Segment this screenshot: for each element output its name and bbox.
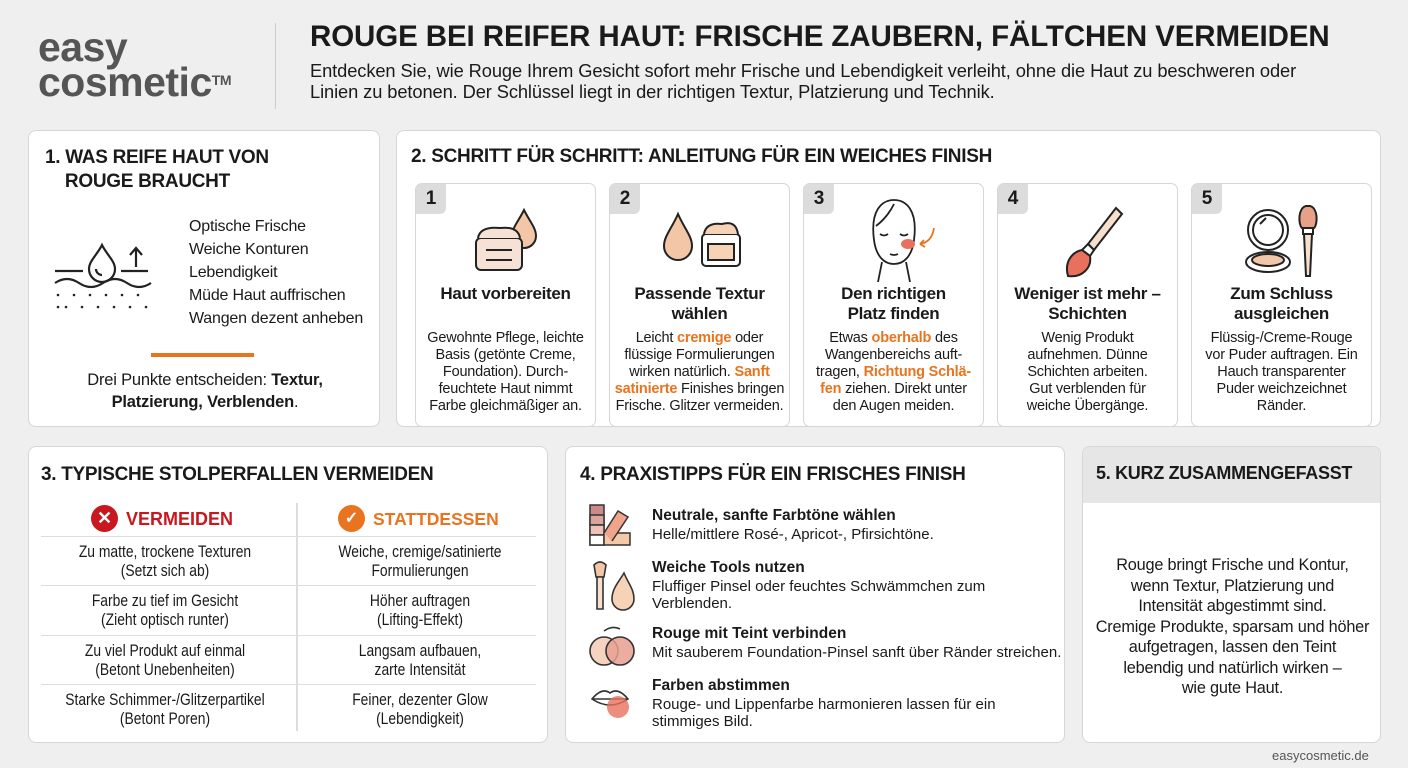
step 5: Hauch transparenter: [1217, 364, 1346, 380]
summary text: Intensität abgestimmt sind.: [1138, 597, 1327, 615]
step 4: Gut verblenden für: [1029, 381, 1146, 397]
step 5: 5: [1202, 188, 1212, 209]
benefit list: Lebendigkeit: [189, 264, 277, 281]
summary text: Rouge bringt Frische und Kontur,: [1116, 556, 1349, 574]
icon: face with blush: [872, 199, 935, 282]
summary text: [1096, 556, 1370, 697]
step 4: Schichten arbeiten.: [1027, 364, 1148, 380]
step 3: den Augen meiden.: [833, 398, 954, 414]
tip 1: [652, 507, 934, 543]
step 1: Gewohnte Pflege, leichte: [427, 330, 584, 346]
panel 3: pitfalls: [28, 446, 548, 743]
column header: avoid: VERMEIDEN: [126, 509, 233, 529]
step 4: Schichten: [1048, 304, 1127, 323]
column header: instead: [338, 505, 499, 532]
step 1: [415, 183, 596, 427]
tip 3: Rouge mit Teint verbinden: [652, 625, 846, 642]
step 2: Frische. Glitzer vermeiden.: [616, 398, 783, 414]
table rows: (Setzt sich ab): [121, 562, 209, 580]
step 5: ausgleichen: [1234, 304, 1329, 323]
tip 2: Weiche Tools nutzen: [652, 559, 805, 576]
column header: avoid: ✕: [97, 508, 112, 528]
icon: drop and jar: [663, 212, 741, 267]
tip 3: Mit sauberem Foundation-Pinsel sanft über Ränder streichen.: [652, 644, 1061, 661]
heading 1: ROUGE BRAUCHT: [65, 171, 230, 192]
step 2: satinierte Finishes bringen: [615, 381, 784, 397]
icon: overlapping circles: [589, 626, 635, 666]
key points: [87, 371, 323, 411]
benefit list: Müde Haut auffrischen: [189, 287, 346, 304]
step 4: Wenig Produkt: [1041, 330, 1134, 346]
step 3: 3: [814, 188, 824, 209]
table rows: (Lebendigkeit): [376, 710, 464, 728]
step 3: Etwas oberhalb des: [829, 330, 958, 346]
table rows: Starke Schimmer-/Glitzerpartikel: [65, 691, 265, 709]
step 3: Wangenbereichs auft-: [825, 347, 962, 363]
icon: cream jar and drop: [475, 208, 537, 271]
step 1: Basis (getönte Creme,: [435, 347, 576, 363]
table rows: zarte Intensität: [375, 661, 465, 679]
title: ROUGE BEI REIFER HAUT: FRISCHE ZAUBERN, FÄLTCHEN VERMEIDEN: [310, 20, 1330, 53]
heading 1: [45, 147, 269, 192]
column header: instead: STATTDESSEN: [373, 509, 499, 529]
step 2: [609, 183, 790, 427]
step 3: Platz finden: [848, 304, 939, 323]
table rows: (Zieht optisch runter): [101, 611, 229, 629]
logo: easy: [38, 24, 127, 70]
summary text: lebendig und natürlich wirken –: [1123, 658, 1342, 676]
tip 1: Neutrale, sanfte Farbtöne wählen: [652, 507, 896, 524]
heading 4: 4. PRAXISTIPPS FÜR EIN FRISCHES FINISH: [580, 464, 966, 485]
heading 2: 2. SCHRITT FÜR SCHRITT: ANLEITUNG FÜR EIN WEICHES FINISH: [411, 146, 992, 167]
heading 3: 3. TYPISCHE STOLPERFALLEN VERMEIDEN: [41, 464, 433, 485]
table rows: (Lifting-Effekt): [377, 611, 463, 629]
summary text: aufgetragen, lassen den Teint: [1129, 638, 1336, 656]
benefit list: Weiche Konturen: [189, 241, 308, 258]
column header: avoid: [91, 505, 233, 532]
step 1: Foundation). Durch-: [443, 364, 568, 380]
step 2: wählen: [672, 304, 727, 323]
tip 2: Fluffiger Pinsel oder feuchtes Schwämmchen zum: [652, 578, 985, 595]
panel 2: steps: [396, 130, 1381, 427]
tip 4: stimmiges Bild.: [652, 713, 753, 730]
heading 5: 5. KURZ ZUSAMMENGEFASST: [1096, 463, 1352, 483]
table rows: Farbe zu tief im Gesicht: [92, 592, 238, 610]
subtitle: Entdecken Sie, wie Rouge Ihrem Gesicht sofort mehr Frische und Lebendigkeit verleiht, ohne die Haut zu beschweren oder: [310, 60, 1296, 81]
step 1: feuchtete Haut nimmt: [439, 381, 572, 397]
step 4: [997, 183, 1178, 427]
step 5: Zum Schluss: [1230, 284, 1333, 303]
step 3: tragen, Richtung Schlä-: [816, 364, 971, 380]
table rows: Höher auftragen: [370, 592, 470, 610]
step 5: Ränder.: [1257, 398, 1306, 414]
tip 2: [652, 559, 985, 612]
step 4: Weniger ist mehr –: [1014, 284, 1161, 303]
icon: swatches: [589, 504, 631, 546]
step 3: fen ziehen. Direkt unter: [820, 381, 967, 397]
step 4: aufnehmen. Dünne: [1027, 347, 1148, 363]
key points: Platzierung, Verblenden.: [112, 393, 298, 411]
step 5: vor Puder auftragen. Ein: [1205, 347, 1358, 363]
step 2: Passende Textur: [634, 284, 765, 303]
summary text: Cremige Produkte, sparsam und höher: [1096, 618, 1369, 636]
step 5: [1191, 183, 1372, 427]
table rows: Zu viel Produkt auf einmal: [85, 642, 245, 660]
heading 5: [1083, 447, 1382, 503]
step 4: weiche Übergänge.: [1027, 398, 1148, 414]
key points: Drei Punkte entscheiden: Textur,: [87, 371, 323, 389]
subtitle: [310, 60, 1296, 102]
table rows: Weiche, cremige/satinierte: [338, 543, 502, 561]
panel 5: summary: [1082, 446, 1381, 743]
step 2: wirken natürlich. Sanft: [629, 364, 770, 380]
tip 4: [652, 677, 996, 730]
panel 1: what mature skin needs: [28, 130, 380, 427]
step 3: [803, 183, 984, 427]
benefit list: Optische Frische: [189, 218, 306, 235]
column header: instead: ✓: [345, 510, 358, 527]
table rows: [41, 536, 536, 728]
logo: cosmeticTM: [38, 59, 231, 105]
summary text: wenn Textur, Platzierung und: [1131, 576, 1334, 594]
tip 3: [652, 625, 1061, 661]
tip 4: Rouge- und Lippenfarbe harmonieren lassen für ein: [652, 696, 996, 713]
step 2: flüssige Formulierungen: [624, 347, 775, 363]
step 1: Haut vorbereiten: [440, 284, 571, 303]
icon: compact and brush: [1245, 205, 1318, 277]
table rows: Langsam aufbauen,: [359, 642, 481, 660]
tip 1: Helle/mittlere Rosé-, Apricot-, Pfirsichtöne.: [652, 526, 934, 543]
subtitle: Linien zu betonen. Der Schlüssel liegt in der richtigen Textur, Platzierung und Technik.: [310, 81, 995, 102]
table rows: (Betont Poren): [120, 710, 210, 728]
step 2: 2: [620, 188, 630, 209]
table rows: Zu matte, trockene Texturen: [79, 543, 251, 561]
icon: brush: [1066, 206, 1124, 278]
panel 4: practical tips: [565, 446, 1065, 743]
step 1: 1: [426, 188, 436, 209]
table rows: (Betont Unebenheiten): [95, 661, 235, 679]
step 5: Puder weichzeichnet: [1216, 381, 1346, 397]
icon: brush and sponge: [593, 561, 635, 611]
benefit list: [189, 218, 363, 327]
step 1: Farbe gleichmäßiger an.: [429, 398, 582, 414]
step 2: Leicht cremige oder: [636, 330, 763, 346]
tip 2: Verblenden.: [652, 595, 732, 612]
footer url: easycosmetic.de: [1272, 748, 1369, 763]
icon: skin hydration: [54, 242, 152, 308]
summary text: wie gute Haut.: [1182, 679, 1283, 697]
icon: lips: [590, 690, 630, 718]
step 5: Flüssig-/Creme-Rouge: [1211, 330, 1352, 346]
table rows: Feiner, dezenter Glow: [352, 691, 488, 709]
tip 4: Farben abstimmen: [652, 677, 790, 694]
table rows: Formulierungen: [371, 562, 469, 580]
heading 1: 1. WAS REIFE HAUT VON: [45, 147, 269, 168]
step 3: Den richtigen: [841, 284, 946, 303]
logo: [38, 24, 231, 105]
benefit list: Wangen dezent anheben: [189, 310, 363, 327]
step 4: 4: [1008, 188, 1018, 209]
